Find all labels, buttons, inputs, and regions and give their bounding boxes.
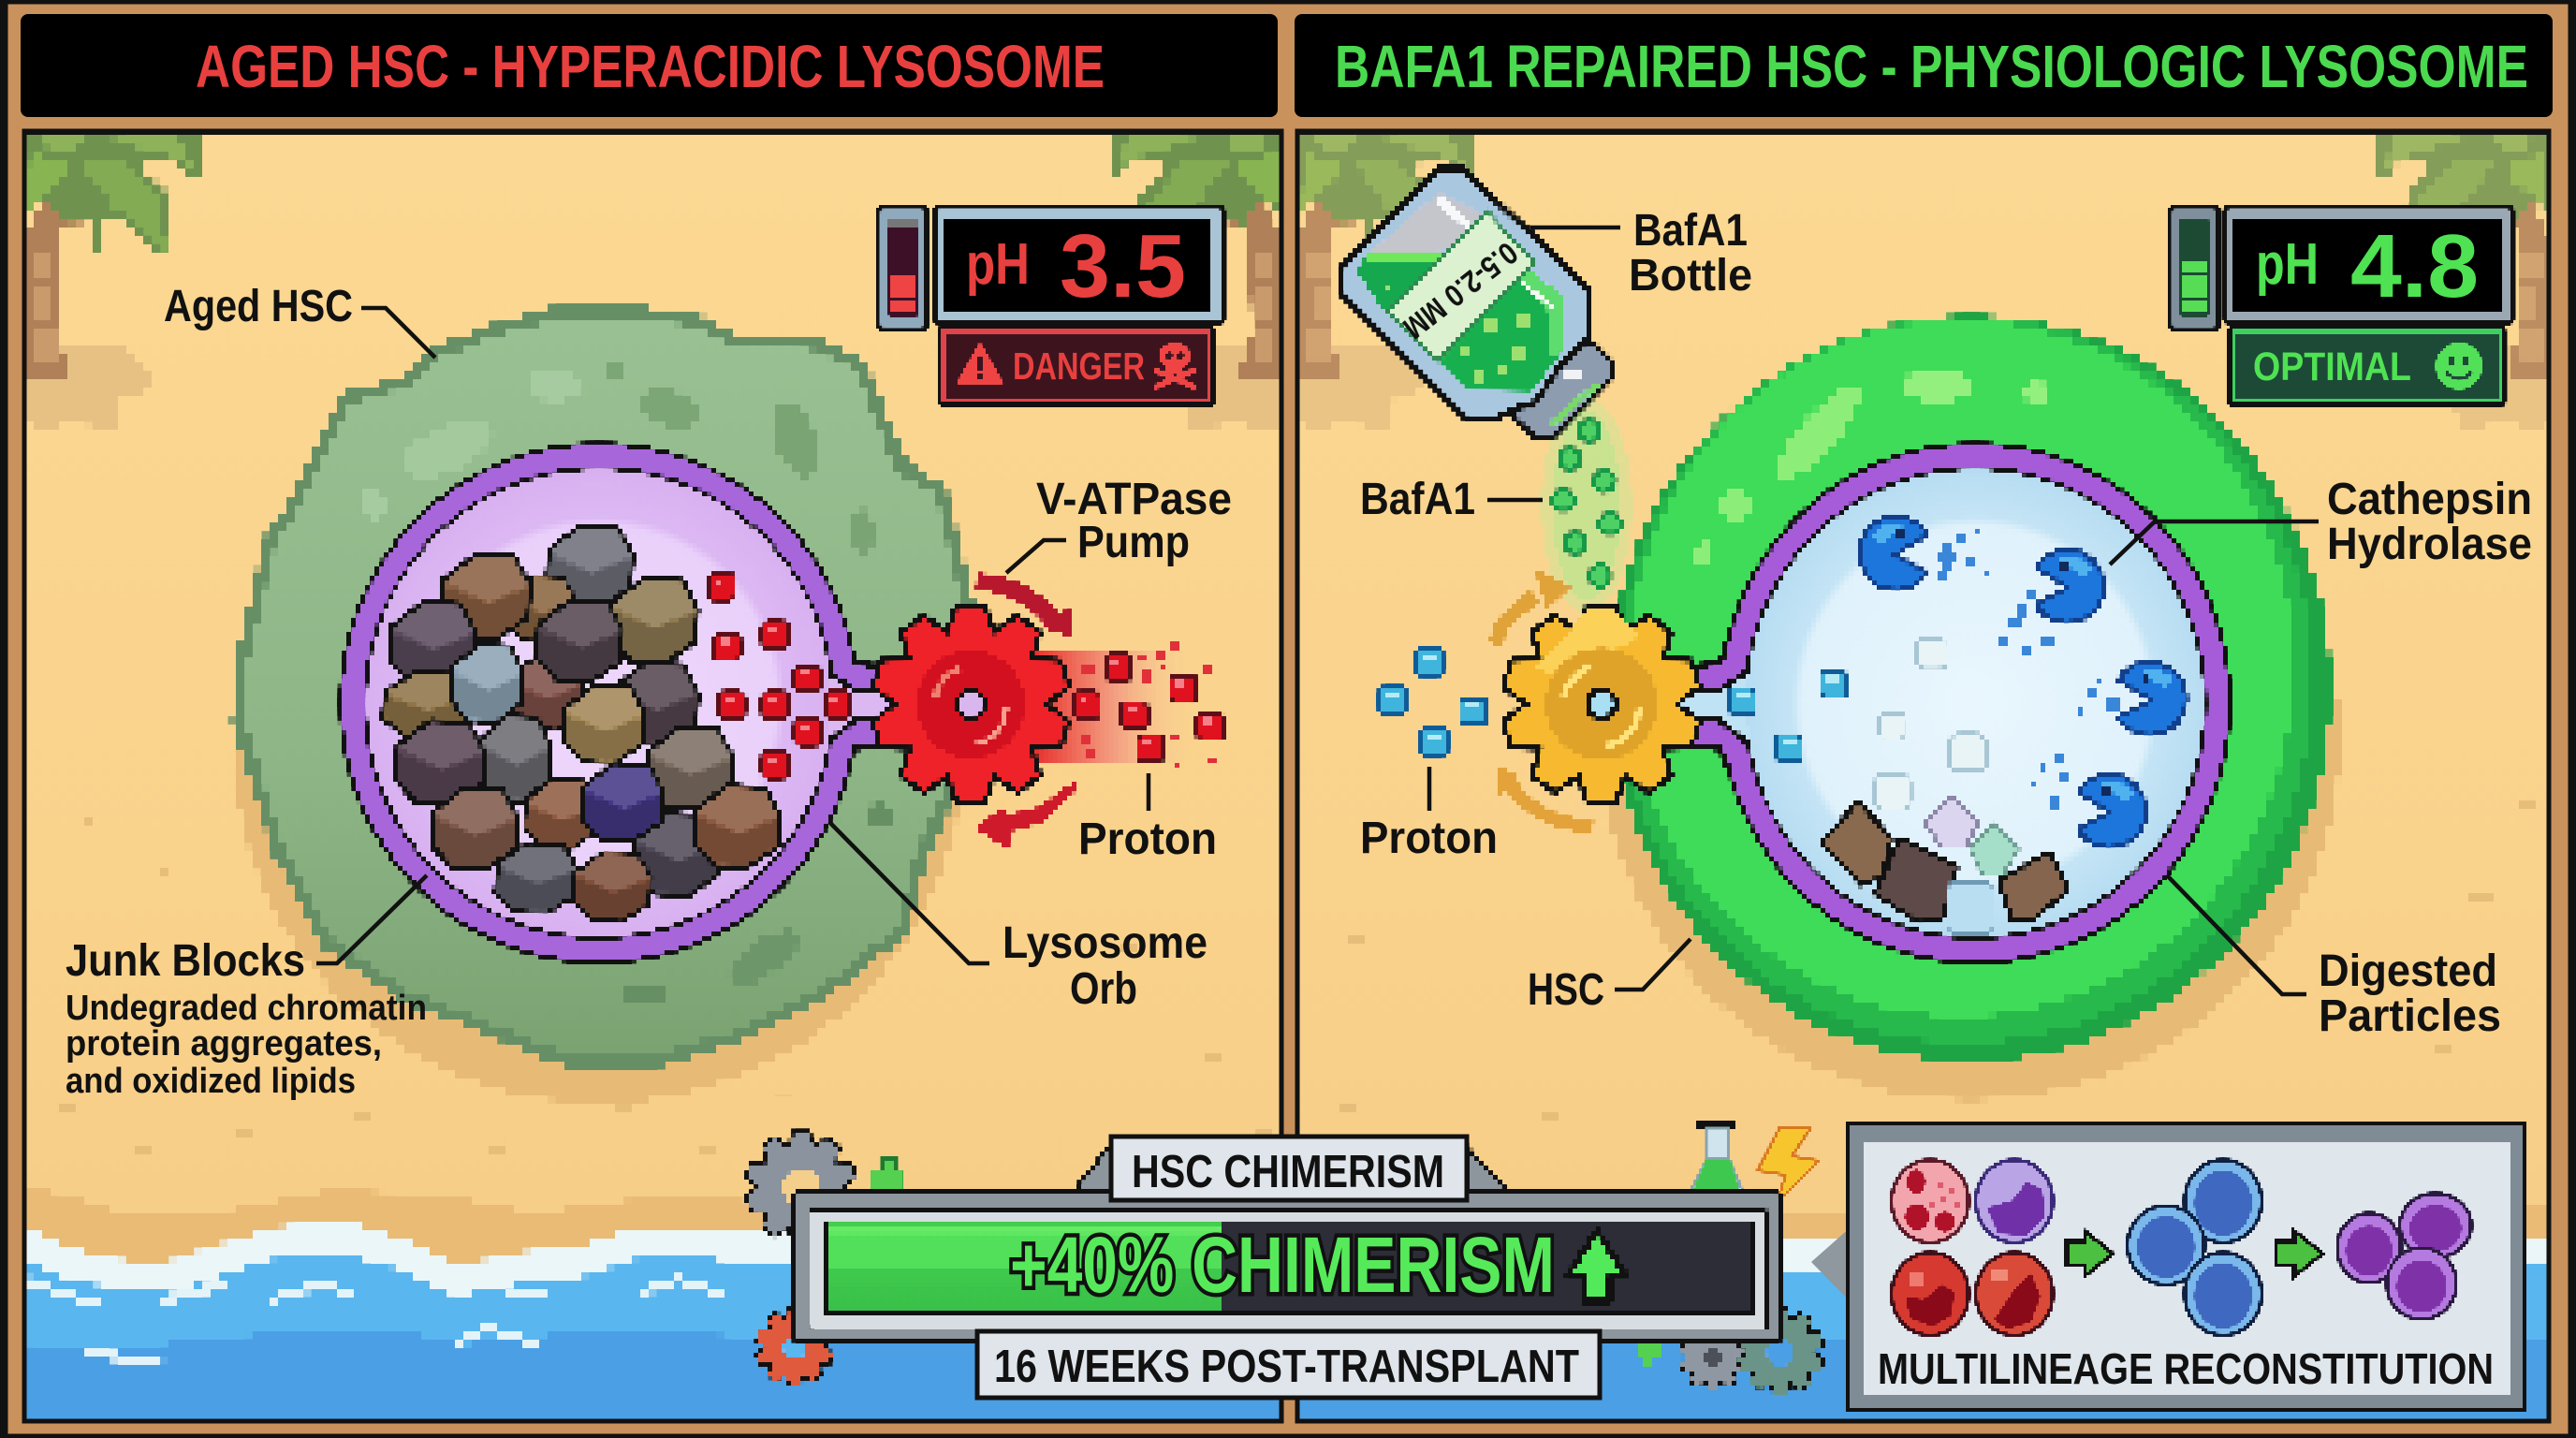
sand speckles [56,805,2535,1152]
palm top right, right panel [2377,131,2549,433]
red gear [756,1310,833,1385]
label: cathepsin hydrolase: Cathepsin [2327,475,2532,524]
label: lysosome orb: Lysosome [1003,918,1208,968]
label: HSC [1528,939,1690,1015]
proton trail [1036,649,1195,761]
label: junk blocks: and oxidized lipids [66,1062,356,1101]
blood cells [1892,1160,2471,1335]
green bit [871,1159,902,1193]
ocean deep water [19,1329,2565,1428]
label: BafA1: BafA1 [1360,475,1475,524]
label: junk blocks [66,875,427,1101]
label: aged HSC [164,282,435,358]
label: aged HSC: Aged HSC [164,282,353,331]
pump arrow upper [976,581,1074,639]
green bit below [1636,1339,1661,1369]
physiologic lysosome orb [1341,169,2232,964]
small grey gear [1680,1326,1746,1389]
pump arrow orange upper [1495,569,1571,644]
label: V-ATPase pump: V-ATPase [1036,475,1232,524]
decorative gears and icons [746,1133,1823,1394]
palm top left, left panel [26,131,198,433]
label: digested particles: Particles [2319,991,2501,1041]
pH gauge: danger [878,207,1223,404]
BafA1 bottle [1341,169,1612,438]
digested particles [1822,797,2069,932]
pH reading 3.5: pH [966,232,1030,297]
lysosome membrane [339,442,899,964]
aged lysosome orb with junk blocks [339,442,1223,964]
cell ground shadows [236,750,960,1104]
label: junk blocks: Undegraded chromatin [66,989,427,1028]
pump arrow lower [976,780,1078,849]
cathepsin pacmen [1860,517,2186,847]
header: aged HSC [21,14,1278,117]
header: aged HSC: AGED HSC - HYPERACIDIC LYSOSOME [196,33,1105,100]
red gear pump [872,608,1069,800]
label: cathepsin hydrolase [2110,475,2532,569]
metal shoulders and body [795,1147,1779,1341]
label: digested particles [2167,875,2501,1041]
tab: HSC chimerism [1111,1137,1467,1200]
translucent particles [1875,638,1986,810]
label: V-ATPase pump [1006,475,1232,573]
blue cells [2128,1160,2261,1335]
junk blocks [383,525,780,921]
label: cathepsin hydrolase: Hydrolase [2327,520,2532,569]
label: BafA1 bottle [1530,206,1752,301]
pH reading 3.5: 3.5 [1060,216,1186,316]
label: BafA1 bottle: Bottle [1629,251,1752,301]
green healthy cell [1610,315,2331,1061]
label: lysosome orb: Orb [1070,964,1137,1014]
red cell two [1976,1253,2053,1335]
right panel labels [1360,206,2532,1041]
lightning [1758,1128,1819,1203]
palm top left, right panel [1299,131,1471,433]
foam [19,1238,2565,1281]
label: BafA1 bottle: BafA1 [1633,206,1748,256]
wet sand band [26,1188,2546,1264]
optimal label: OPTIMAL [2253,345,2411,389]
tab: 16 weeks [977,1331,1600,1398]
yellow gear pump [1503,608,1700,800]
tab: 16 weeks: 16 WEEKS POST-TRANSPLANT [994,1342,1579,1392]
pump arrow orange lower [1498,765,1593,827]
pH reading 3.5 [966,216,1186,316]
label: junk blocks: protein aggregates, [66,1024,382,1064]
pH reading 4.8 [2256,216,2479,316]
label: lysosome orb [829,822,1208,1014]
left panel labels [66,282,1232,1101]
arrow one [2067,1231,2113,1276]
pH reading 4.8: pH [2256,232,2319,297]
label: V-ATPase pump: Pump [1077,518,1190,567]
ocean light water [19,1249,2565,1428]
bottle dose text: 0.5-2.0 MM [1397,235,1524,345]
chimerism value: +40% CHIMERISM [1010,1221,1555,1309]
label: digested particles: Digested [2319,946,2497,996]
palm top right, left panel [1109,131,1281,433]
panel frame [1848,1123,2525,1410]
label: proton: Proton [1078,814,1217,864]
arrow two [2276,1231,2322,1276]
aged HSC cell illustration [238,312,973,1061]
danger label: DANGER [1013,345,1145,388]
panel: multilineage reconstitution [1811,1123,2525,1410]
teal gear [1737,1310,1823,1394]
red cell one [1892,1253,1969,1335]
BafA1 droplet glow [1542,398,1632,613]
BafA1 droplets [1553,420,1620,586]
red protons [709,574,1223,778]
purple cell [1976,1160,2053,1242]
purple cells [2337,1194,2471,1319]
label: junk blocks: Junk Blocks [66,936,305,986]
repaired HSC cell illustration [1610,315,2331,1061]
pH gauge: optimal [2170,207,2512,404]
panel caption: MULTILINEAGE RECONSTITUTION [1878,1344,2494,1393]
grey gear [746,1133,856,1241]
label: HSC: HSC [1528,965,1604,1015]
pink mottled cell [1892,1160,1969,1242]
tab: HSC chimerism: HSC CHIMERISM [1132,1147,1444,1197]
label: proton: Proton [1360,814,1498,863]
flask [1686,1122,1747,1201]
pH reading 4.8: 4.8 [2350,216,2479,316]
chimerism status bar [746,1122,1823,1398]
pointer [1811,1226,1852,1303]
aged cell blob [238,312,973,1061]
header: BafA1 repaired HSC [1295,14,2553,117]
blue protons [1380,649,1847,761]
lysosome membrane [1676,442,2232,964]
